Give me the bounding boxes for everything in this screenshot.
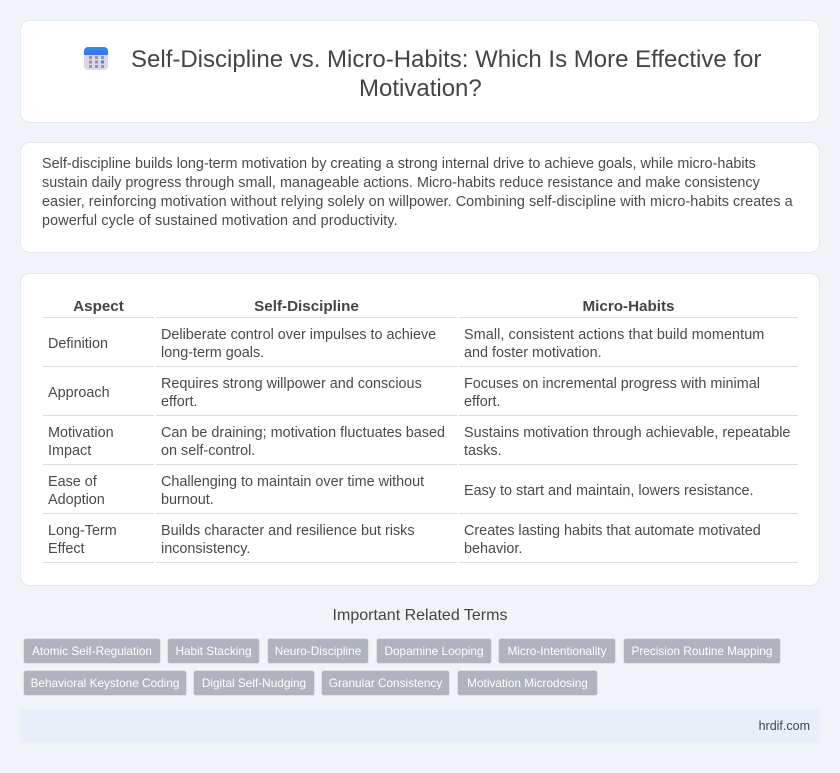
- row: motivation impact: tasks.: [464, 443, 502, 459]
- row: long-term effect: Long-Term: [48, 523, 117, 539]
- footer source text: hrdif.com: [759, 719, 810, 733]
- intro text panel: [20, 142, 820, 253]
- title: Self-Discipline vs. Micro-Habits: Which Is More Effective for: [131, 46, 761, 73]
- row: motivation impact: Impact: [48, 443, 91, 459]
- related terms tags: Behavioral Keystone Coding: [31, 676, 179, 690]
- intro paragraph: easier, reinforcing motivation without relying solely on willpower. Combining self-discipline with micro-habits creates a: [42, 194, 793, 210]
- row: approach: effort.: [161, 394, 198, 410]
- related terms tags: [23, 638, 781, 696]
- row: ease of adoption: Easy to start and maintain, lowers resistance.: [464, 483, 754, 499]
- row: definition: and foster motivation.: [464, 345, 602, 361]
- title: [131, 46, 761, 102]
- row: ease of adoption: [48, 474, 754, 508]
- related terms tags: Atomic Self-Regulation: [32, 644, 152, 658]
- row: approach: Approach: [48, 385, 110, 401]
- row: approach: effort.: [464, 394, 501, 410]
- table header: Micro-Habits: [582, 298, 674, 315]
- header panel: [20, 20, 820, 123]
- row: definition: Deliberate control over impulses to achieve: [161, 327, 436, 343]
- related terms tags: Precision Routine Mapping: [632, 644, 772, 658]
- row: definition: Definition: [48, 336, 108, 352]
- icon: calendar: [84, 47, 108, 70]
- row: definition: Small, consistent actions that build momentum: [464, 327, 764, 343]
- intro paragraph: powerful cycle of sustained motivation and productivity.: [42, 213, 398, 229]
- row: motivation impact: Sustains motivation through achievable, repeatable: [464, 425, 790, 441]
- related terms tags: Dopamine Looping: [384, 644, 484, 658]
- row: motivation impact: on self-control.: [161, 443, 255, 459]
- row: long-term effect: Effect: [48, 541, 85, 557]
- title: Motivation?: [359, 75, 482, 102]
- related terms tags: Digital Self-Nudging: [202, 676, 306, 690]
- row: long-term effect: Creates lasting habits that automate motivated: [464, 523, 761, 539]
- related terms heading: Important Related Terms: [333, 607, 507, 624]
- related terms tags: Micro-Intentionality: [507, 644, 606, 658]
- row: ease of adoption: Challenging to maintain over time without: [161, 474, 424, 490]
- intro paragraph: [42, 156, 793, 229]
- row: definition: long-term goals.: [161, 345, 264, 361]
- row: ease of adoption: Adoption: [48, 492, 105, 508]
- intro paragraph: Self-discipline builds long-term motivation by creating a strong internal drive to achieve goals, while micro-habits: [42, 156, 756, 172]
- row: approach: Requires strong willpower and conscious: [161, 376, 422, 392]
- row: definition: [48, 327, 764, 361]
- table header: Self-Discipline: [254, 298, 359, 315]
- row: approach: [48, 376, 760, 410]
- row: ease of adoption: burnout.: [161, 492, 214, 508]
- row: motivation impact: Motivation: [48, 425, 114, 441]
- intro paragraph: sustain daily progress through small, manageable actions. Micro-habits reduce resistance and make consistency: [42, 175, 760, 191]
- related terms tags: Habit Stacking: [175, 644, 252, 658]
- row: long-term effect: inconsistency.: [161, 541, 250, 557]
- row: motivation impact: [48, 425, 790, 459]
- related terms tags: Motivation Microdosing: [467, 676, 588, 690]
- table header: [73, 298, 674, 315]
- row: motivation impact: Can be draining; motivation fluctuates based: [161, 425, 445, 441]
- row: long-term effect: [48, 523, 761, 557]
- comparison table panel: [20, 273, 820, 586]
- row: long-term effect: Builds character and resilience but risks: [161, 523, 415, 539]
- table header: Aspect: [73, 298, 124, 315]
- related terms tags: Granular Consistency: [329, 676, 442, 690]
- footer bar: [20, 709, 820, 743]
- row: approach: Focuses on incremental progress with minimal: [464, 376, 760, 392]
- row: long-term effect: behavior.: [464, 541, 522, 557]
- related terms tags: Neuro-Discipline: [275, 644, 361, 658]
- row: ease of adoption: Ease of: [48, 474, 97, 490]
